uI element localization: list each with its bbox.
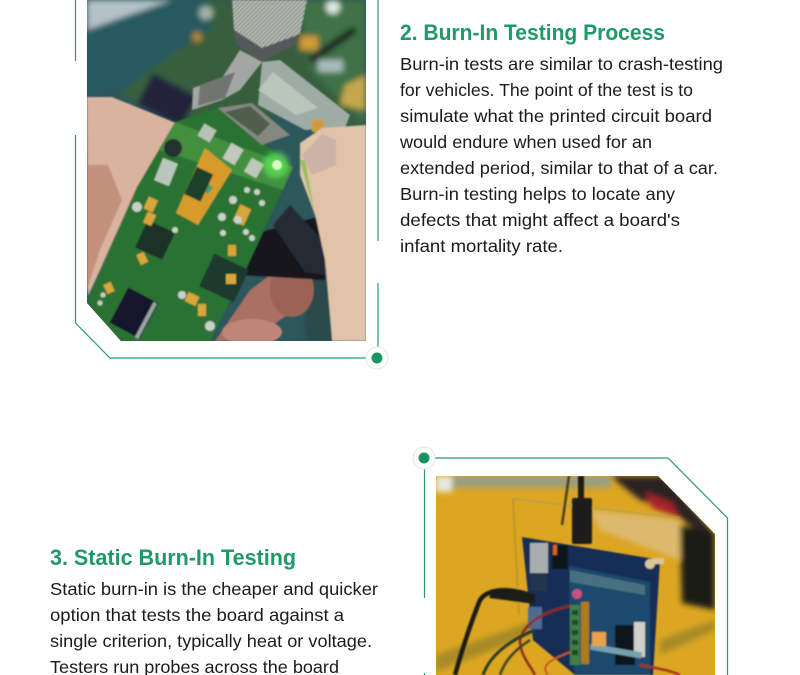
- board: [87, 108, 293, 341]
- text block: section 2 body: extended period, similar to that of a car.: [400, 158, 718, 178]
- left hand: [87, 97, 176, 296]
- black clip: [273, 205, 325, 275]
- text block: section 3 body: option that tests the board against a: [50, 605, 344, 625]
- text block: section 2 body: infant mortality rate.: [400, 236, 563, 256]
- cables: [455, 590, 535, 675]
- bolt: [645, 559, 655, 569]
- text block: section 2 body: Burn-in testing helps to locate any: [400, 184, 675, 204]
- photo: hands holding a green circuit board: [87, 0, 366, 345]
- icon: frame node dot, section 2: [366, 347, 388, 369]
- text block: section 2 body: defects that might affect a board's: [400, 210, 680, 230]
- shield: [569, 566, 650, 675]
- lower fingers: [214, 276, 286, 341]
- icon: frame node dot, section 3: [413, 447, 435, 469]
- text block: section 2 body: for vehicles. The point of the test is to: [400, 80, 693, 100]
- text block: section 2 body: would endure when used for an: [399, 132, 652, 152]
- text block: section 3 body: single criterion, typically heat or voltage.: [50, 631, 372, 651]
- green terminal: [570, 605, 580, 665]
- text block: section 3 body: Static burn-in is the cheaper and quicker: [50, 579, 378, 599]
- thumb: [300, 125, 366, 341]
- connector: [232, 0, 307, 48]
- usb cable: [578, 476, 584, 505]
- text block: section 2 body: [399, 54, 723, 256]
- text block: section 2 body: simulate what the printed circuit board: [400, 106, 712, 126]
- photo: circuit board on acrylic stand: [436, 476, 715, 675]
- text block: section 3 body: [50, 579, 378, 675]
- text block: section 2 body: Burn-in tests are similar to crash-testing: [400, 54, 723, 74]
- heading: section 2: 2. Burn-In Testing Process: [400, 20, 665, 45]
- heading: section 3: 3. Static Burn-In Testing: [50, 545, 296, 570]
- panel: static burn-in photo frame: [424, 458, 728, 675]
- panel: burn-in photo frame: [76, 0, 378, 358]
- main board: [522, 537, 660, 675]
